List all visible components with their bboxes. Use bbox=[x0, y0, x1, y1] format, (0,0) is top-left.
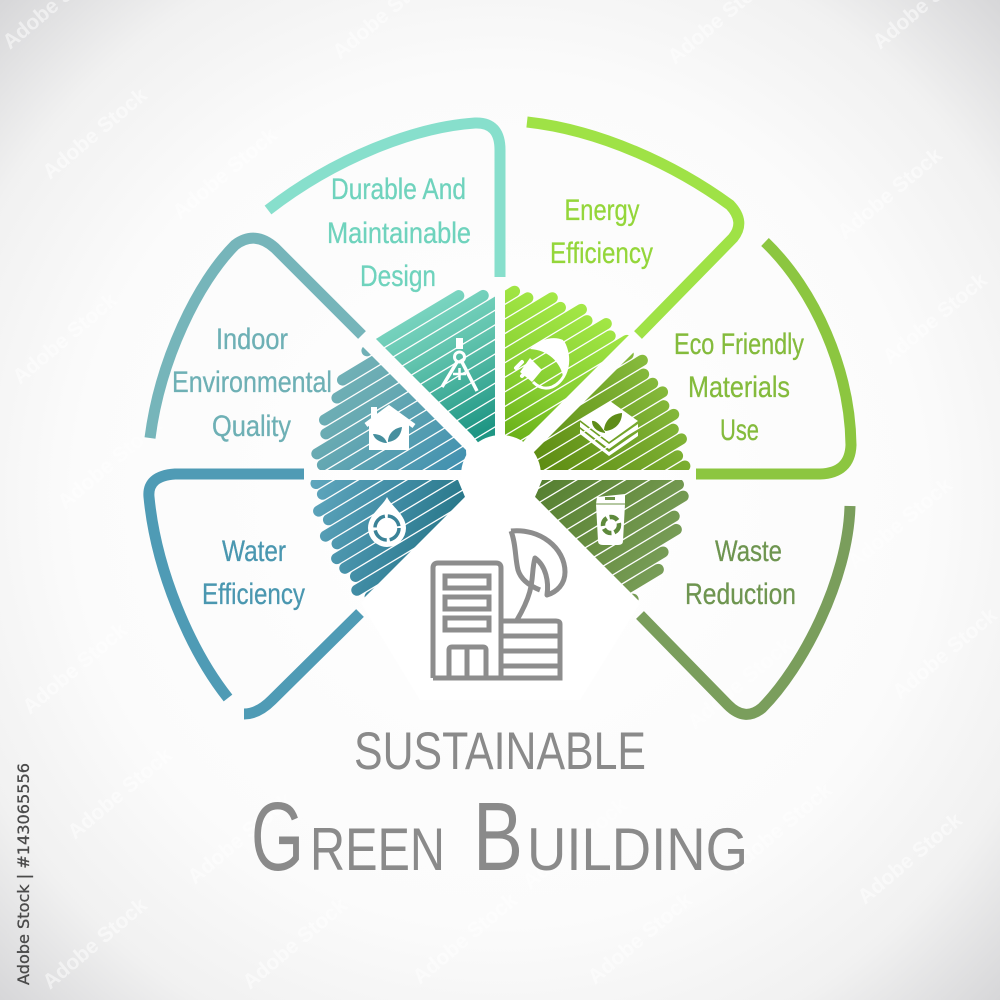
title bbox=[251, 722, 748, 891]
label: Maintainable bbox=[327, 217, 471, 250]
icon: water drop recycle bbox=[368, 497, 406, 547]
label: Reduction bbox=[685, 578, 796, 611]
label: Indoor bbox=[216, 323, 288, 356]
label: Design bbox=[360, 260, 436, 293]
leaf bbox=[511, 531, 565, 620]
scribble wedge bbox=[311, 347, 466, 470]
title: UILDING bbox=[527, 816, 748, 883]
watermarks: Adobe Stock bbox=[18, 619, 132, 719]
scribble wedge bbox=[376, 290, 495, 442]
outline bbox=[696, 242, 851, 474]
label: Use bbox=[720, 414, 759, 447]
watermarks: Adobe Stock bbox=[238, 894, 352, 994]
watermarks: Adobe Stock bbox=[183, 789, 297, 889]
watermarks: Adobe Stock bbox=[63, 744, 177, 844]
watermarks: Adobe Stock bbox=[518, 794, 632, 894]
watermarks: Adobe Stock bbox=[8, 289, 122, 389]
label: Efficiency bbox=[550, 237, 653, 270]
watermarks: Adobe Stock bbox=[38, 84, 152, 184]
label: Efficiency bbox=[202, 578, 305, 611]
watermarks: Adobe Stock bbox=[888, 604, 1000, 704]
watermarks: Adobe Stock bbox=[38, 894, 152, 994]
label: Water bbox=[222, 535, 286, 568]
label: Energy bbox=[564, 194, 640, 227]
centre hub bbox=[361, 435, 640, 700]
panel: eco friendly materials use bbox=[530, 242, 851, 474]
icon: recycle bin bbox=[596, 494, 626, 545]
label: Durable And bbox=[331, 173, 466, 206]
panel: waste reduction bbox=[535, 480, 850, 714]
label: Eco Friendly bbox=[674, 328, 804, 361]
watermarks: Adobe Stock bbox=[853, 809, 967, 909]
stock id: Adobe Stock | #143065556 bbox=[14, 763, 33, 985]
scribble wedge bbox=[534, 352, 690, 470]
outline bbox=[640, 506, 850, 714]
icon: compass bbox=[442, 338, 477, 391]
watermarks: Adobe Stock bbox=[833, 144, 947, 244]
watermarks: Adobe Stock bbox=[168, 124, 282, 224]
watermarks: Adobe Stock bbox=[843, 474, 957, 574]
outline bbox=[149, 474, 360, 714]
title: SUSTAINABLE bbox=[354, 722, 646, 781]
icon: material layers with leaf bbox=[580, 401, 638, 456]
outline bbox=[268, 123, 500, 277]
outline bbox=[527, 122, 739, 335]
tower bbox=[433, 563, 501, 678]
panel: durable and maintainable design bbox=[268, 123, 500, 463]
panel: indoor environmental quality bbox=[150, 238, 467, 470]
label: Materials bbox=[688, 371, 790, 404]
label: Environmental bbox=[172, 366, 332, 399]
watermarks: Adobe Stock bbox=[878, 269, 992, 369]
outline bbox=[150, 238, 362, 438]
label: Quality bbox=[212, 410, 291, 443]
label: Waste bbox=[715, 535, 782, 568]
watermarks: Adobe Stock bbox=[408, 889, 522, 989]
scribble wedge bbox=[505, 286, 629, 442]
watermarks: Adobe Stock bbox=[683, 634, 797, 734]
panel: water efficiency bbox=[149, 474, 465, 714]
icon: green building bbox=[433, 531, 565, 678]
title: REEN bbox=[310, 816, 445, 883]
icon: house with leaf bbox=[366, 407, 414, 450]
title: B bbox=[473, 782, 523, 891]
panel: energy efficiency bbox=[505, 122, 739, 463]
watermarks: Adobe Stock bbox=[723, 779, 837, 879]
watermarks: Adobe Stock bbox=[583, 889, 697, 989]
watermarks: Adobe Stock bbox=[53, 414, 167, 514]
title: G bbox=[251, 782, 304, 891]
icon: plug with leaf bbox=[516, 338, 568, 388]
scribble wedge bbox=[535, 480, 689, 600]
scribble wedge bbox=[310, 480, 465, 598]
